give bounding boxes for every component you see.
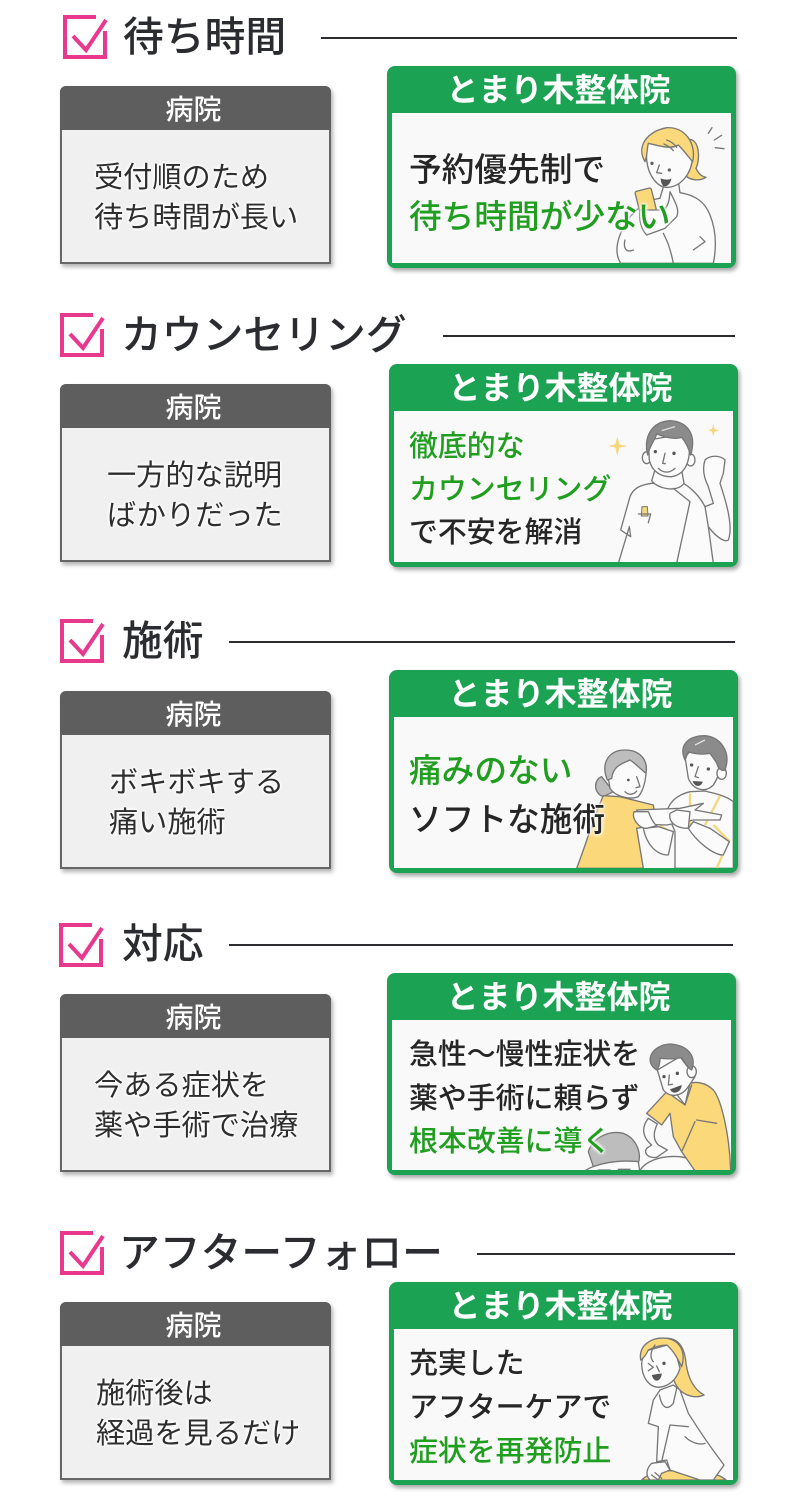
icon: pink checkbox [63, 15, 108, 59]
clinic text: ソフトな施術 [409, 801, 605, 838]
illustration: woman with smartphone [616, 127, 725, 263]
clinic text: アフターケアで [409, 1392, 611, 1424]
heading: カウンセリング [121, 312, 407, 358]
panel: clinic [389, 670, 738, 873]
panel: clinic [387, 973, 736, 1175]
icon: pink checkbox [60, 313, 105, 357]
clinic text: 予約優先制で [409, 150, 605, 188]
panel: hospital [60, 1302, 331, 1480]
panel header: 病院 [165, 392, 222, 423]
panel header: 病院 [165, 699, 222, 730]
clinic text [409, 150, 672, 234]
hospital text [109, 767, 284, 839]
panel header [60, 86, 331, 130]
icon: pink checkbox [60, 619, 105, 663]
heading rule [477, 1253, 735, 1255]
panel header: 病院 [165, 1002, 222, 1033]
illustration: practitioner treating patient lying down [585, 1043, 731, 1170]
clinic header: とまり木整体院 [448, 370, 672, 406]
heading rule [321, 37, 737, 39]
panel header: 病院 [165, 94, 222, 125]
hospital text: 薬や手術で治療 [94, 1110, 298, 1142]
clinic text [409, 430, 611, 548]
clinic body [394, 1329, 733, 1480]
clinic text: 根本改善に導く [409, 1126, 611, 1158]
heading rule [443, 335, 735, 337]
panel header [60, 994, 331, 1038]
clinic text [409, 1348, 611, 1468]
clinic text: 症状を再発防止 [409, 1436, 611, 1468]
hospital text: 受付順のため [94, 162, 269, 194]
hospital text: 待ち時間が長い [94, 202, 298, 234]
clinic text: 待ち時間が少ない [409, 198, 670, 234]
hospital text: 今ある症状を [94, 1070, 269, 1102]
section: アフターフォロー [60, 1230, 743, 1491]
icon: pink checkbox [60, 1231, 105, 1275]
clinic text [409, 1039, 640, 1158]
clinic text [409, 752, 607, 838]
heading: 待ち時間 [123, 14, 286, 60]
hospital text: ボキボキする [109, 767, 284, 799]
heading rule [229, 641, 735, 643]
clinic body [394, 717, 733, 868]
clinic header: とまり木整体院 [448, 676, 672, 712]
illustration: practitioner treating elderly patient [576, 735, 733, 868]
illustration: woman bending forward [640, 1337, 727, 1480]
section: カウンセリング [60, 312, 743, 573]
panel: clinic [389, 364, 738, 567]
panel: hospital [60, 994, 331, 1172]
section: 待ち時間 [60, 14, 741, 274]
section: 施術 [60, 618, 743, 879]
clinic text: 急性～慢性症状を [409, 1039, 640, 1071]
clinic body [392, 1020, 731, 1170]
section: 対応 [59, 921, 741, 1181]
clinic body [394, 411, 733, 562]
panel header [60, 384, 331, 428]
hospital text: 経過を見るだけ [96, 1418, 300, 1450]
clinic text: 徹底的な [409, 430, 525, 462]
clinic text: 痛みのない [409, 752, 572, 789]
icon: pink checkbox [59, 923, 104, 967]
clinic body [392, 113, 731, 263]
panel: hospital [60, 86, 331, 264]
hospital text: 一方的な説明 [107, 460, 282, 492]
heading: アフターフォロー [119, 1230, 443, 1276]
hospital text [107, 460, 283, 532]
panel header [60, 1302, 331, 1346]
clinic text: カウンセリング [409, 474, 611, 506]
heading rule [229, 944, 733, 946]
illustration: practitioner with raised fist [608, 420, 731, 562]
panel: hospital [60, 691, 331, 869]
panel header: 病院 [165, 1310, 222, 1341]
panel: clinic [389, 1282, 738, 1485]
clinic text: 充実した [409, 1348, 525, 1380]
panel: clinic [387, 66, 736, 268]
clinic text: 薬や手術に頼らず [409, 1082, 640, 1114]
panel header [60, 691, 331, 735]
hospital text: 痛い施術 [109, 807, 226, 839]
hospital text [96, 1378, 300, 1450]
panel: hospital [60, 384, 331, 562]
hospital text [94, 162, 298, 234]
hospital text [94, 1070, 298, 1142]
heading: 対応 [122, 921, 204, 967]
clinic header: とまり木整体院 [448, 1288, 672, 1324]
hospital text: 施術後は [96, 1378, 213, 1410]
clinic header: とまり木整体院 [446, 72, 670, 108]
clinic header: とまり木整体院 [446, 979, 670, 1015]
hospital text: ばかりだった [107, 500, 283, 532]
heading: 施術 [122, 618, 204, 664]
clinic text: で不安を解消 [409, 516, 582, 548]
